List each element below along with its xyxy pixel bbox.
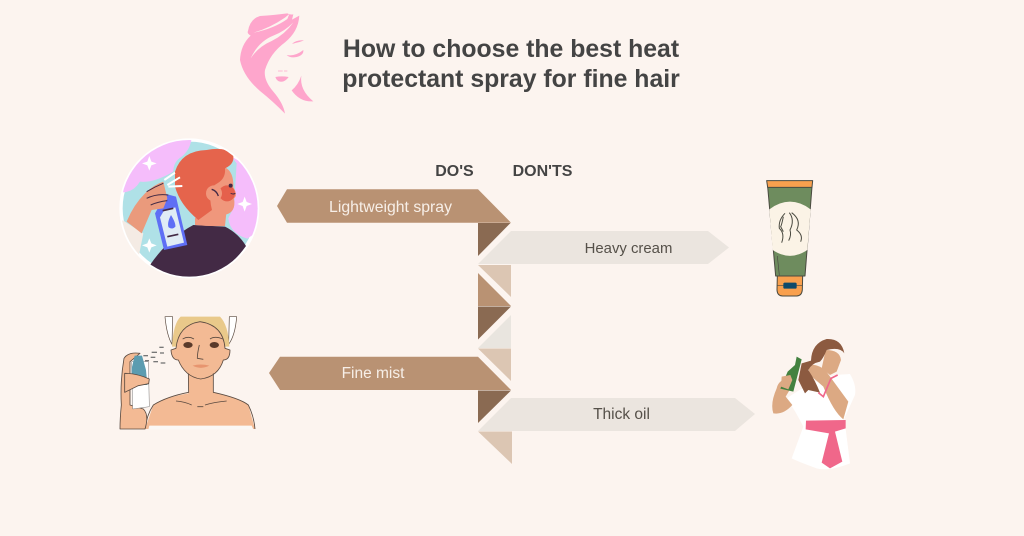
title: How to choose the best heat xyxy=(343,36,679,63)
fold triangles column xyxy=(478,223,512,464)
don't arrow: heavy cream: Heavy cream xyxy=(585,241,672,257)
column headings xyxy=(435,163,573,180)
top do arrow: lightweight spray xyxy=(277,189,511,223)
column headings: DON'TS xyxy=(513,163,573,180)
column headings: DO'S xyxy=(435,163,474,180)
title: protectant spray for fine hair xyxy=(342,66,680,93)
icon: person spraying hair in circle xyxy=(117,135,260,278)
infographic canvas xyxy=(120,13,856,469)
icon: woman with towel using mist spray xyxy=(120,317,255,429)
don't arrow: heavy cream xyxy=(478,231,729,264)
do arrow: fine mist: Fine mist xyxy=(342,365,405,382)
icon: cream tube xyxy=(767,181,813,296)
title xyxy=(342,36,680,93)
don't arrow: thick oil: Thick oil xyxy=(593,406,650,423)
don't arrow: thick oil xyxy=(478,398,755,431)
icon: woman in robe applying oil xyxy=(772,339,855,469)
top do arrow: lightweight spray: Lightweight spray xyxy=(329,199,452,216)
do arrow: fine mist xyxy=(269,357,511,390)
icon: pink hair logo xyxy=(240,13,313,114)
